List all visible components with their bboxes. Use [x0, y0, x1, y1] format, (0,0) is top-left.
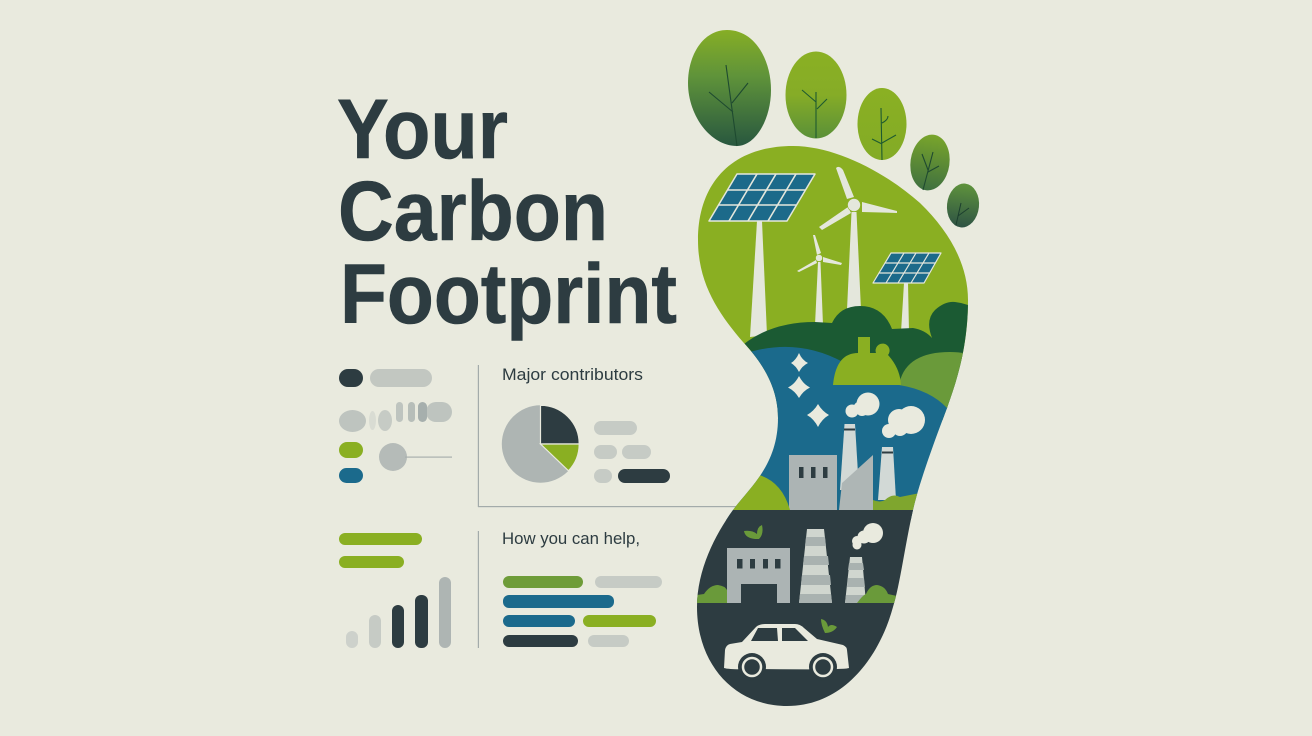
title — [337, 82, 677, 341]
bush right — [857, 585, 897, 603]
toe 4 — [907, 132, 953, 193]
smoke cloud 2 — [882, 406, 925, 438]
legend panel: abstract pills and dots — [339, 369, 452, 483]
title: Footprint — [340, 247, 677, 341]
pie legend pills — [594, 421, 670, 483]
smoke cloud 1 — [846, 392, 880, 418]
green summary bars — [339, 533, 422, 568]
smoke cloud 3 — [852, 523, 883, 550]
striped chimney small — [845, 557, 866, 603]
sparkles — [788, 353, 829, 427]
solar panel large — [709, 174, 815, 337]
pie chart — [502, 405, 579, 483]
green energy zone — [690, 140, 980, 360]
striped cooling tower — [799, 529, 832, 603]
dark green hills — [735, 302, 975, 420]
heading: how you can help: How you can help, — [502, 529, 640, 548]
heading: major contributors: Major contributors — [502, 365, 643, 384]
divider: horizontal — [478, 506, 736, 507]
leaf sprout near car — [821, 619, 837, 633]
green shrubs right — [873, 493, 920, 510]
title: Carbon — [338, 164, 608, 258]
wind turbine small — [797, 235, 842, 325]
action bars — [503, 576, 662, 647]
toe 1 — [688, 30, 771, 146]
factory building lower — [727, 548, 790, 603]
divider: upper vertical — [478, 365, 479, 507]
title: Your — [337, 82, 508, 176]
leaf sprout upper — [744, 525, 763, 539]
bar chart — [346, 577, 451, 648]
wind turbine large — [819, 167, 897, 310]
chimney upper right — [878, 447, 896, 500]
divider: lower vertical — [478, 531, 479, 648]
mid green hill — [899, 352, 963, 408]
footprint sole illustration — [690, 140, 980, 710]
solar panel small — [873, 253, 941, 332]
angled factory shed — [839, 455, 873, 510]
car — [724, 624, 849, 681]
green domed mound — [833, 337, 901, 385]
factory building upper — [789, 455, 837, 510]
toe 3 — [858, 88, 906, 160]
blue sky zone — [725, 347, 955, 520]
dark ground zone — [697, 510, 913, 706]
green mound left — [733, 475, 790, 510]
bush left — [697, 585, 727, 603]
chimney upper left — [840, 424, 859, 490]
toe 5 — [945, 182, 981, 229]
toe 2 — [786, 52, 846, 138]
